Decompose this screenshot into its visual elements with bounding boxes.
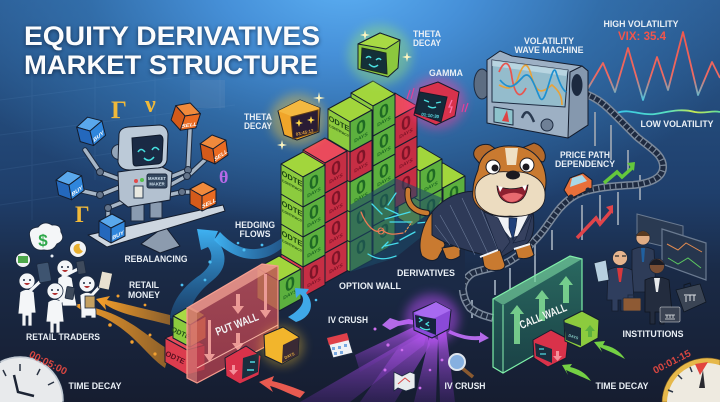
muzzle xyxy=(475,172,545,216)
column F xyxy=(398,146,442,231)
label: time decay right: TIME DECAY xyxy=(596,381,648,391)
icon: gold cube xyxy=(260,326,304,366)
column E: 0 xyxy=(401,111,411,136)
icon: buy cube bottom xyxy=(99,214,125,243)
torso xyxy=(118,166,172,207)
label: volatility wave machine: WAVE MACHINE xyxy=(514,45,584,55)
icon: sell cube lower xyxy=(190,182,216,211)
arrow: green up xyxy=(604,168,632,183)
icon: buy cube top: BUY xyxy=(93,130,104,144)
column F: 0 xyxy=(426,164,436,189)
torso: MAKER xyxy=(149,182,165,186)
greek symbols: Γ xyxy=(111,97,127,124)
icon: sell cube right xyxy=(199,133,229,166)
icon: green cube right xyxy=(564,311,599,348)
call wall: CALL WALL xyxy=(518,302,569,332)
timer left: 00:05:00 xyxy=(27,349,69,378)
icon: car xyxy=(564,173,592,200)
call wall xyxy=(493,256,582,373)
column A xyxy=(281,152,325,297)
column D: DAYS xyxy=(377,145,391,159)
column A: DAYS xyxy=(307,276,321,290)
thought bubble with dollar: $ xyxy=(38,231,48,250)
bubble with cash xyxy=(16,252,30,268)
column A: ODTE xyxy=(282,199,303,219)
ribbed side drum xyxy=(474,69,490,99)
volatility wave machine xyxy=(474,51,588,138)
column B: DAYS xyxy=(329,172,343,186)
column D: 0 xyxy=(379,99,389,124)
retail money arrows xyxy=(74,294,170,368)
arrow: red up xyxy=(577,210,612,238)
column A: DAYS xyxy=(307,246,321,260)
character: theta decay green cube xyxy=(348,25,412,85)
column D: DAYS xyxy=(377,175,391,189)
label: iv crush lower: IV CRUSH xyxy=(444,381,486,391)
icon: purple cube xyxy=(405,294,459,344)
label: rebalancing: REBALANCING xyxy=(124,254,188,264)
column C: ODTE xyxy=(329,114,350,134)
nose and mouth xyxy=(497,170,528,203)
suit body xyxy=(432,191,534,258)
icon: gold cube: DAYS xyxy=(283,351,296,360)
icon: buy cube left: BUY xyxy=(72,185,83,198)
column A: DAYS xyxy=(307,216,321,230)
column A: 0 xyxy=(309,230,319,255)
column A: CONTRACT xyxy=(282,239,303,254)
front paws xyxy=(482,250,505,270)
column C: DAYS xyxy=(354,191,368,205)
hedging flows arrows xyxy=(170,229,317,322)
column D: 0 xyxy=(379,129,389,154)
label: hedging flows: HEDGING xyxy=(235,220,275,230)
figures xyxy=(18,260,96,333)
greek symbols: ν xyxy=(144,92,156,118)
front cube: 0 xyxy=(285,272,295,297)
column A: 0 xyxy=(309,170,319,195)
mask below the stack xyxy=(350,205,465,290)
odte cubes behind put wall: ODTE xyxy=(164,349,187,366)
icon: green cube right: DAYS xyxy=(568,334,579,341)
icon: red countdown cube xyxy=(225,346,261,384)
option wall: cube stack xyxy=(257,81,465,311)
icon: sell cube top: SELL xyxy=(181,122,198,130)
label: high volatility: HIGH VOLATILITY xyxy=(604,19,678,29)
ears xyxy=(474,144,500,164)
phones and card xyxy=(37,260,113,308)
column A: 0 xyxy=(309,200,319,225)
icon: dark bank briefcase xyxy=(660,307,680,322)
roller coaster track xyxy=(463,90,663,318)
head xyxy=(473,146,546,217)
man back xyxy=(632,231,656,292)
column G: 0 xyxy=(449,181,459,206)
faces xyxy=(23,266,91,295)
column B: DAYS xyxy=(329,232,343,246)
seesaw xyxy=(88,205,225,253)
icon: buy cube top xyxy=(75,114,107,148)
icon: magnifier xyxy=(449,354,473,377)
label: price path dependency: PRICE PATH xyxy=(560,150,610,160)
label: theta decay right: DECAY xyxy=(413,38,441,48)
label: derivatives: DERIVATIVES xyxy=(397,268,455,278)
time decay right clock xyxy=(662,358,720,402)
label: retail traders: RETAIL TRADERS xyxy=(26,332,100,342)
label: price path dependency: DEPENDENCY xyxy=(555,159,615,169)
label: retail money: RETAIL xyxy=(129,280,159,290)
head xyxy=(112,125,168,170)
column F: DAYS xyxy=(424,180,438,194)
icon: sell cube right: SELL xyxy=(214,148,228,163)
column D: 0 xyxy=(379,219,389,244)
column E: DAYS xyxy=(399,157,413,171)
column B: DAYS xyxy=(329,262,343,276)
volatility line chart xyxy=(587,32,720,114)
icon: map xyxy=(394,372,415,391)
odte cubes behind put wall: ODTE xyxy=(170,326,191,341)
control panel xyxy=(494,107,553,131)
greek symbols: θ xyxy=(219,167,228,187)
column D xyxy=(351,81,395,256)
derivatives neon overlay xyxy=(350,178,442,272)
front cube xyxy=(257,256,301,311)
trading screen back xyxy=(637,214,683,251)
column A: CONTRACT xyxy=(282,209,303,224)
column E: DAYS xyxy=(399,127,413,141)
column E xyxy=(373,93,417,208)
column A: ODTE xyxy=(282,169,303,189)
column C xyxy=(328,97,372,272)
column D: DAYS xyxy=(377,115,391,129)
price path car and arrows xyxy=(564,162,635,238)
back legs xyxy=(420,212,445,261)
character: theta decay gold cube xyxy=(270,92,326,150)
column D: 0 xyxy=(379,159,389,184)
speech bubble with moon xyxy=(70,240,86,258)
label: institutions: INSTITUTIONS xyxy=(622,329,684,339)
column C: 0 xyxy=(356,145,366,170)
column C: 0 xyxy=(356,115,366,140)
put wall: PUT WALL xyxy=(214,311,261,339)
column D: 0 xyxy=(379,189,389,214)
greek symbols xyxy=(75,92,228,227)
label: low volatility: LOW VOLATILITY xyxy=(640,119,714,129)
character: gamma pink cube xyxy=(407,77,468,129)
man bald xyxy=(594,250,634,311)
title: EQUITY DERIVATIVES xyxy=(24,21,320,51)
column B: 0 xyxy=(331,186,341,211)
icon: sell cube lower: SELL xyxy=(202,198,216,210)
column C: CONTRACT xyxy=(329,124,350,139)
column E: 0 xyxy=(401,141,411,166)
bulldog in suit xyxy=(408,143,546,270)
column G xyxy=(421,163,465,218)
column B: DAYS xyxy=(329,202,343,216)
torso: MARKET xyxy=(148,176,166,181)
character: gamma pink cube: 01:10:30 xyxy=(421,112,440,119)
column A: DAYS xyxy=(307,186,321,200)
column E: 0 xyxy=(401,171,411,196)
title xyxy=(24,21,320,80)
label: option wall: OPTION WALL xyxy=(339,281,401,291)
trading screen front xyxy=(662,229,706,280)
arrows: green time decay xyxy=(562,341,625,381)
column C: DAYS xyxy=(354,161,368,175)
label: time decay left: TIME DECAY xyxy=(68,381,122,391)
label: theta decay right xyxy=(413,29,441,48)
label: VIX value: VIX: 35.4 xyxy=(618,31,667,43)
label: gamma: GAMMA xyxy=(429,68,463,78)
icon: sell cube top xyxy=(169,99,203,135)
column A: 0 xyxy=(309,260,319,285)
column C: DAYS xyxy=(354,131,368,145)
label: volatility wave machine xyxy=(514,36,584,55)
timer right: 00:01:15 xyxy=(651,348,693,377)
greek symbols: Γ xyxy=(75,202,90,227)
column A: ODTE xyxy=(282,229,303,249)
tail xyxy=(408,190,427,213)
put wall xyxy=(187,264,278,383)
front cube: DAYS xyxy=(283,288,297,302)
label: retail money: MONEY xyxy=(128,290,160,300)
title: MARKET STRUCTURE xyxy=(24,50,318,80)
column F: 0 xyxy=(426,194,436,219)
iv crush purple burst xyxy=(300,318,489,402)
label: theta decay left xyxy=(244,112,272,131)
retail traders group xyxy=(16,223,113,333)
eyes xyxy=(486,158,534,174)
arrow: red flow xyxy=(259,376,305,398)
label: iv crush upper: IV CRUSH xyxy=(328,315,368,325)
label: hedging flows xyxy=(235,220,275,239)
column C: 0 xyxy=(356,205,366,230)
icon: buy cube left xyxy=(55,169,85,202)
label: price path dependency xyxy=(555,150,615,169)
icon: red countdown cube right xyxy=(533,330,568,367)
odte cubes behind put wall xyxy=(164,306,206,375)
column B: 0 xyxy=(331,216,341,241)
institutions group xyxy=(594,214,706,324)
icon: buy cube bottom: BUY xyxy=(112,230,124,242)
character: theta decay gold cube: 03:45:12 xyxy=(295,128,315,137)
column B: 0 xyxy=(331,246,341,271)
column A: CONTRACT xyxy=(282,179,303,194)
label: theta decay right: THETA xyxy=(413,29,441,39)
time decay left clock xyxy=(0,356,64,402)
icon: brown briefcase xyxy=(623,295,641,311)
label: theta decay left: DECAY xyxy=(244,121,272,131)
shirt and tie xyxy=(484,212,533,255)
label: volatility wave machine: VOLATILITY xyxy=(524,36,574,46)
screen xyxy=(492,60,568,107)
column B xyxy=(303,138,347,283)
column B: 0 xyxy=(331,156,341,181)
label: retail money xyxy=(128,280,160,300)
icon: gray bank briefcase xyxy=(676,283,706,312)
arms xyxy=(78,130,207,218)
man front xyxy=(645,258,672,324)
label: theta decay left: THETA xyxy=(244,112,272,122)
icon: calendar xyxy=(327,333,353,358)
column C: 0 xyxy=(356,175,366,200)
label: hedging flows: FLOWS xyxy=(240,229,270,239)
legs xyxy=(131,202,162,221)
column C: 0 xyxy=(356,235,366,260)
robot market maker on seesaw xyxy=(55,92,229,253)
